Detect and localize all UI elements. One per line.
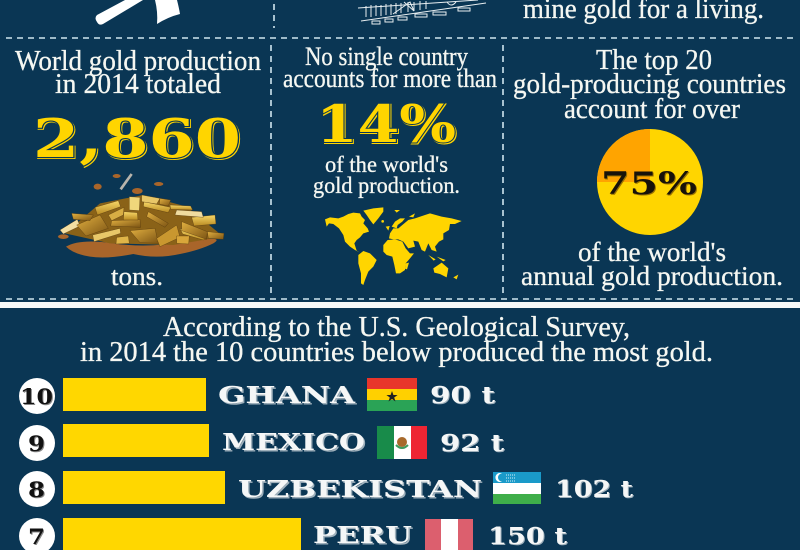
row: Mexico: [19, 424, 505, 461]
pie chart: 75 percent: 75%: [602, 167, 698, 203]
row: Peru: 7: [28, 524, 45, 549]
row: Uzbekistan: [19, 471, 634, 507]
icon: pile of gold bars and coins: [58, 174, 224, 258]
row: Uzbekistan: 102 t: [555, 476, 633, 503]
row: Mexico: 92 t: [440, 430, 504, 457]
heading: USGS top 10: in 2014 the 10 countries below produced the most gold.: [80, 337, 713, 368]
text: tons: tons.: [111, 262, 163, 291]
heading: top 20 countries: The top 20: [596, 44, 712, 76]
heading: top 20 countries: account for over: [564, 93, 740, 125]
text: of the world's annual gold production: [521, 237, 783, 291]
heading: no single country: accounts for more than: [283, 64, 497, 93]
heading: world gold production: World gold production: [15, 45, 261, 77]
icon: world map: [325, 207, 462, 285]
stat: 2,860: 2,860: [34, 109, 242, 171]
pie chart: 75 percent: [597, 129, 703, 235]
heading: world gold production: [15, 45, 261, 100]
row: Peru: PERU: [314, 524, 414, 550]
row: Ghana: [19, 378, 496, 414]
text: of the world's gold production: [313, 152, 460, 198]
heading: USGS top 10: [80, 312, 713, 368]
row: Uzbekistan: UZBEKISTAN: [240, 478, 484, 504]
stat: 2,860: 2,860: [33, 108, 241, 170]
pie chart: 75 percent: 75%: [601, 166, 697, 202]
row: Ghana: GHANA: [220, 384, 358, 410]
panel: top 20 countries: [513, 44, 786, 291]
icon: pickaxe: [96, 0, 180, 25]
panel: world gold production: [15, 45, 261, 291]
row: Mexico: MEXICO: [222, 429, 365, 456]
panel: no single country: [283, 42, 497, 285]
heading: no single country: No single country: [305, 42, 468, 71]
text: of the world's gold production: of the world's: [325, 152, 448, 177]
row: Peru: [19, 518, 568, 550]
row: Peru: 150 t: [488, 523, 567, 550]
row: Uzbekistan: 8: [28, 477, 45, 502]
row: Mexico: 9: [28, 431, 45, 456]
row: Ghana: 90 t: [430, 382, 495, 409]
row: Ghana: 90 t: [431, 383, 496, 410]
row: Uzbekistan: 102 t: [556, 477, 634, 504]
row: Mexico: MEXICO: [224, 430, 366, 458]
row: Uzbekistan: 8: [29, 478, 46, 503]
heading: no single country: [283, 42, 497, 93]
stat: 14%: 14%: [317, 96, 457, 156]
row: Uzbekistan: UZBEKISTAN: [238, 476, 482, 503]
heading: USGS top 10: According to the U.S. Geological Survey,: [163, 312, 630, 343]
row: Peru: 7: [29, 525, 46, 550]
text: of the world's gold production: gold production.: [313, 173, 460, 198]
heading: top 20 countries: gold-producing countries: [513, 68, 786, 100]
row: Ghana: 10: [20, 384, 53, 409]
text: of the world's annual gold production: annual gold production.: [521, 261, 783, 291]
row: Peru: PERU: [313, 522, 412, 549]
row: Mexico: 92 t: [441, 431, 505, 458]
text: of the world's annual gold production: of the world's: [578, 237, 726, 267]
row: Mexico: 9: [29, 432, 46, 457]
bar chart: top producers: [19, 378, 634, 550]
stat: 14%: 14%: [316, 95, 456, 155]
row: Ghana: GHANA: [218, 382, 357, 409]
row: Ghana: 10: [21, 385, 54, 410]
heading: world gold production: in 2014 totaled: [55, 68, 221, 100]
icon: mine rail track: [358, 0, 486, 24]
heading: top 20 countries: [513, 44, 786, 125]
